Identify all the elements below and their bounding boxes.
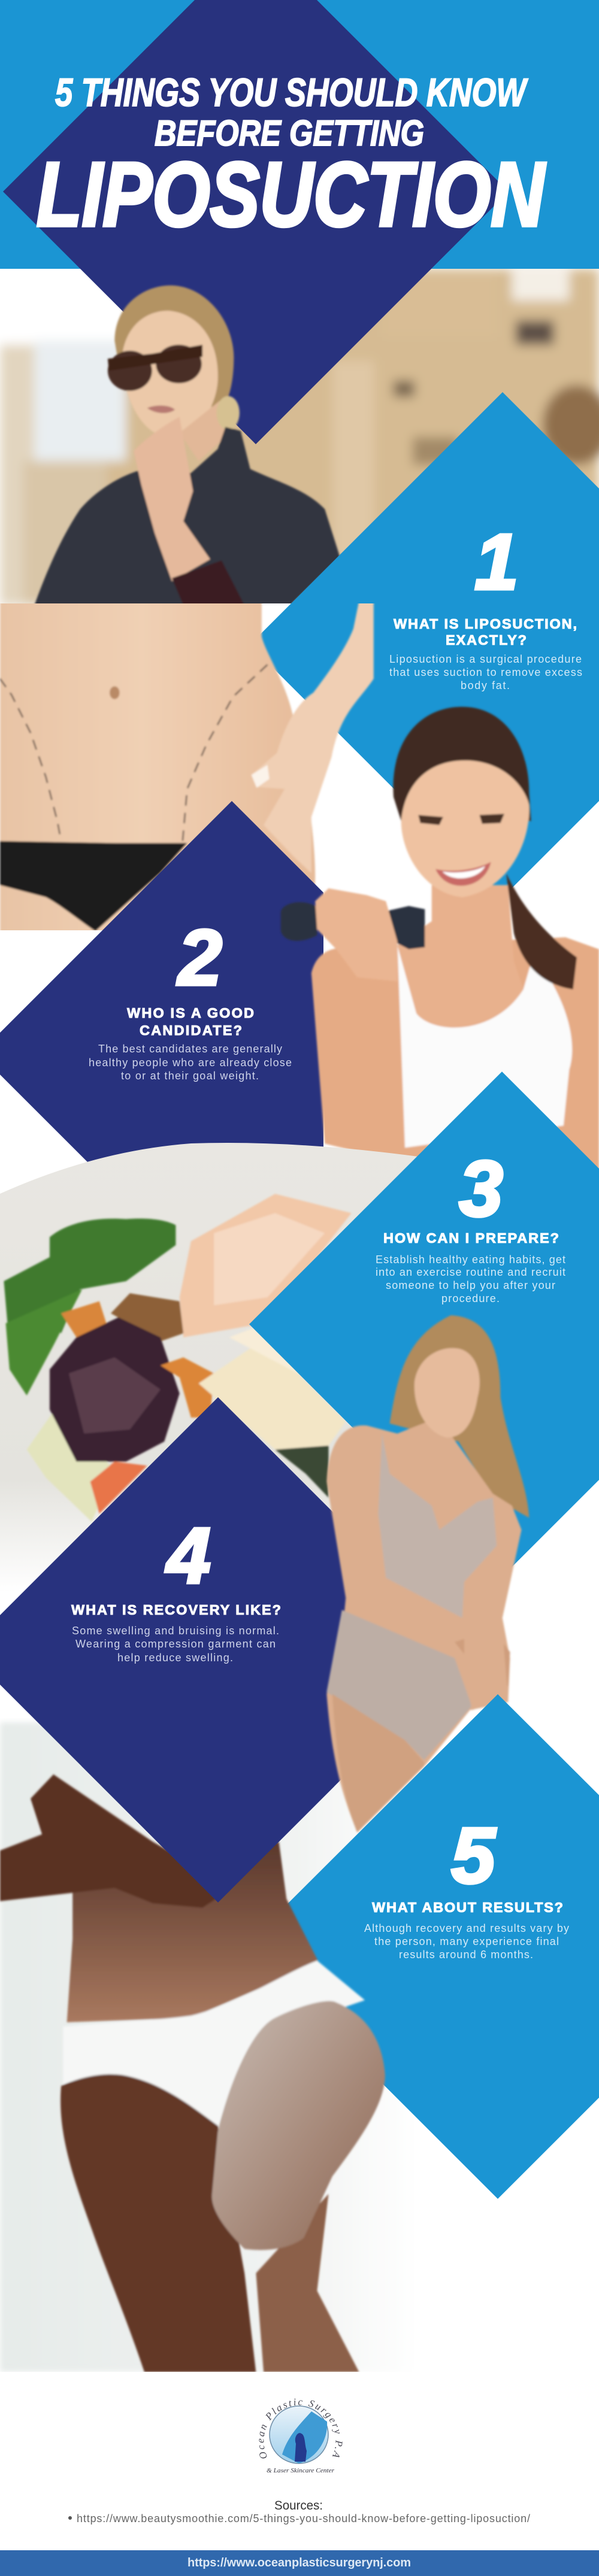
photo: salad plate: [0, 1143, 539, 1592]
body line 3: results around 6 months.: [399, 1949, 533, 1961]
photo: woman lying on bed: [0, 1774, 385, 2372]
source url: https://www.beautysmoothie.com/5-things-you-should-know-before-getting-liposuction/: [77, 2513, 530, 2525]
body: Establish healthy eating habits, get: [376, 1254, 565, 1266]
photo: woman with dumbbell: [281, 707, 599, 1190]
number 5: 5: [451, 1812, 496, 1900]
panel 2 diamond: [0, 801, 323, 1162]
main title: [37, 70, 546, 245]
footer bar: [0, 2550, 599, 2576]
logo: ocean plastic surgery: [259, 2398, 343, 2474]
logo medallion: [270, 2406, 328, 2463]
panel 5 diamond: [245, 1694, 599, 2199]
sources heading: Sources:: [274, 2499, 323, 2513]
number 1: 1: [474, 518, 519, 606]
heading: WHAT IS RECOVERY LIKE?: [71, 1602, 281, 1618]
heading line 2: EXACTLY?: [446, 632, 527, 648]
panel 3 diamond: [249, 1072, 599, 1577]
panel 4 text: [71, 1512, 281, 1664]
food: [4, 1194, 352, 1522]
bed sheets background: [0, 1721, 345, 2372]
heading: HOW CAN I PREPARE?: [383, 1230, 559, 1246]
panel 3 text: [376, 1145, 565, 1304]
body: Liposuction is a surgical procedure: [389, 653, 582, 665]
logo ring text: Ocean Plastic Surgery P.A.: [259, 2398, 343, 2459]
body: Some swelling and bruising is normal.: [72, 1625, 279, 1637]
body: The best candidates are generally: [98, 1043, 282, 1055]
panel 5 text: [364, 1812, 569, 1961]
panel 4 diamond: [0, 1397, 471, 1903]
title line 2: BEFORE GETTING: [155, 113, 424, 153]
body line 2: into an exercise routine and recruit: [376, 1266, 565, 1278]
number 4: 4: [165, 1512, 211, 1600]
logo tagline: & Laser Skincare Center: [267, 2467, 335, 2474]
footer url: https://www.oceanplasticsurgerynj.com: [187, 2556, 411, 2569]
body line 2: healthy people who are already close: [89, 1057, 292, 1069]
body line 3: body fat.: [461, 679, 510, 691]
body line 4: procedure.: [441, 1292, 500, 1304]
body line 2: the person, many experience final: [374, 1935, 559, 1947]
heading line 2: CANDIDATE?: [140, 1022, 242, 1038]
photo: woman in sunglasses: [34, 286, 340, 605]
heading: WHAT ABOUT RESULTS?: [372, 1900, 563, 1915]
number 2: 2: [176, 914, 222, 1002]
body line 3: someone to help you after your: [386, 1279, 555, 1291]
heading: WHAT IS LIPOSUCTION,: [394, 616, 577, 632]
panel 4 diamond tip: [81, 1766, 334, 1903]
body line 3: to or at their goal weight.: [121, 1070, 259, 1082]
plate: [0, 1143, 539, 1592]
number 3: 3: [459, 1145, 503, 1233]
panel 2 text: [89, 914, 292, 1082]
body line 2: Wearing a compression garment can: [75, 1638, 276, 1650]
header band: [0, 0, 599, 269]
photo: woman in shapewear: [326, 1315, 529, 1832]
panel 1 diamond: [250, 392, 599, 897]
body line 2: that uses suction to remove excess: [389, 666, 582, 678]
photo: marked abdomen: [0, 600, 374, 945]
body line 3: help reduce swelling.: [117, 1652, 233, 1664]
header navy diamond: [3, 0, 509, 444]
heading: WHO IS A GOOD: [127, 1005, 254, 1021]
source bullet: [68, 2516, 72, 2520]
panel 1 text: [389, 518, 582, 691]
body: Although recovery and results vary by: [364, 1922, 569, 1934]
sources: [68, 2499, 530, 2525]
photo background: blurred street: [0, 257, 599, 605]
